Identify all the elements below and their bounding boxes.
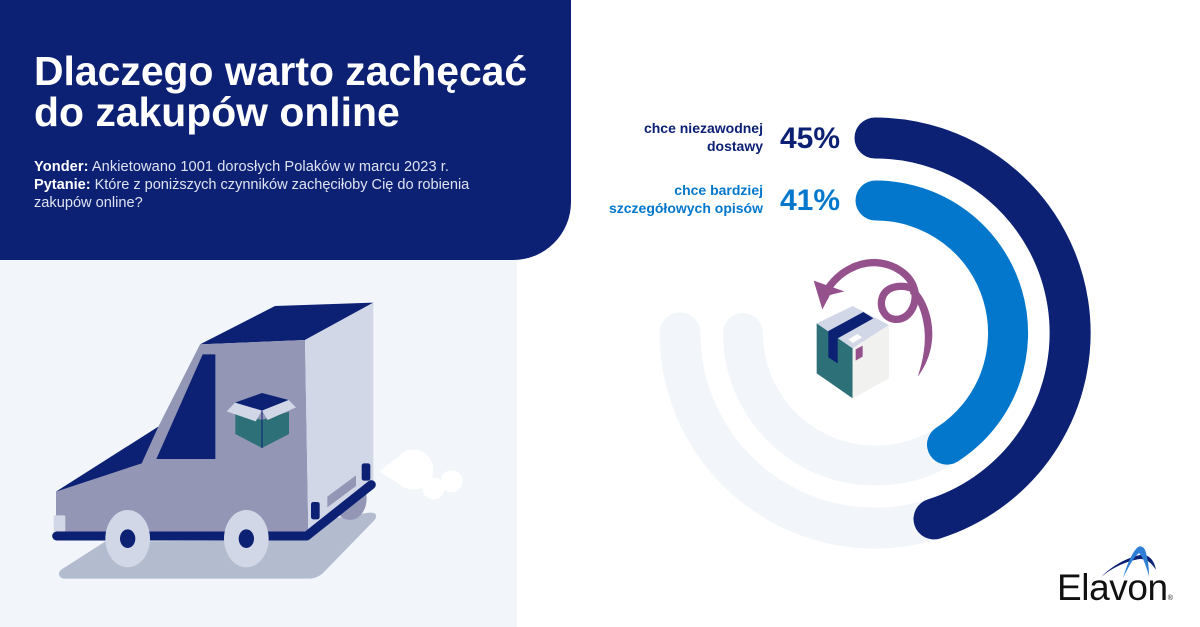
parcel (817, 306, 889, 398)
label: reliable delivery: chce niezawodnej (644, 120, 763, 136)
panel: light truck background (0, 240, 517, 627)
logo wordmark: Elavon® (1057, 566, 1173, 608)
title: Dlaczego warto zachęcać (34, 48, 527, 94)
title (34, 48, 527, 135)
value: 45%: 45% (780, 122, 840, 155)
logo swoosh (1101, 546, 1156, 578)
outer ring value 45% (875, 138, 1070, 519)
inner ring track (743, 333, 947, 466)
label: reliable delivery: dostawy (707, 138, 763, 154)
inner ring value 41% (876, 200, 1008, 445)
label: detailed descriptions: chce bardziej (674, 182, 763, 198)
truck rear (305, 303, 373, 531)
truck side (56, 340, 308, 533)
rear lights and plate (311, 463, 370, 519)
back wheel (224, 510, 269, 567)
open box on truck (227, 393, 296, 448)
value: 41%: 41% (780, 184, 840, 217)
headlight (54, 515, 65, 531)
label: detailed descriptions: szczegółowych opisów (609, 200, 763, 216)
label: reliable delivery (644, 120, 763, 154)
rear wheel (333, 477, 367, 520)
icon: parcel with return arrow (814, 258, 932, 398)
exhaust cloud (379, 450, 463, 499)
label: detailed descriptions (609, 182, 763, 216)
return arrow (814, 263, 932, 377)
survey description: Pytanie: Które z poniższych czynników zachęciłoby Cię do robienia (34, 177, 469, 193)
panel: navy header (0, 0, 571, 260)
ground shadow (59, 513, 376, 579)
survey description (34, 159, 470, 211)
truck hood (56, 427, 158, 492)
logo: Elavon (1057, 546, 1173, 608)
front wheel (105, 510, 150, 567)
chassis (57, 485, 371, 536)
survey description: Yonder: Ankietowano 1001 dorosłych Polaków w marcu 2023 r. (34, 159, 449, 175)
truck roof (200, 303, 373, 344)
title: do zakupów online (34, 89, 400, 135)
truck window (156, 354, 215, 459)
illustration: delivery truck (52, 302, 462, 579)
outer ring track (680, 333, 934, 528)
survey description: zakupów online? (34, 195, 143, 211)
